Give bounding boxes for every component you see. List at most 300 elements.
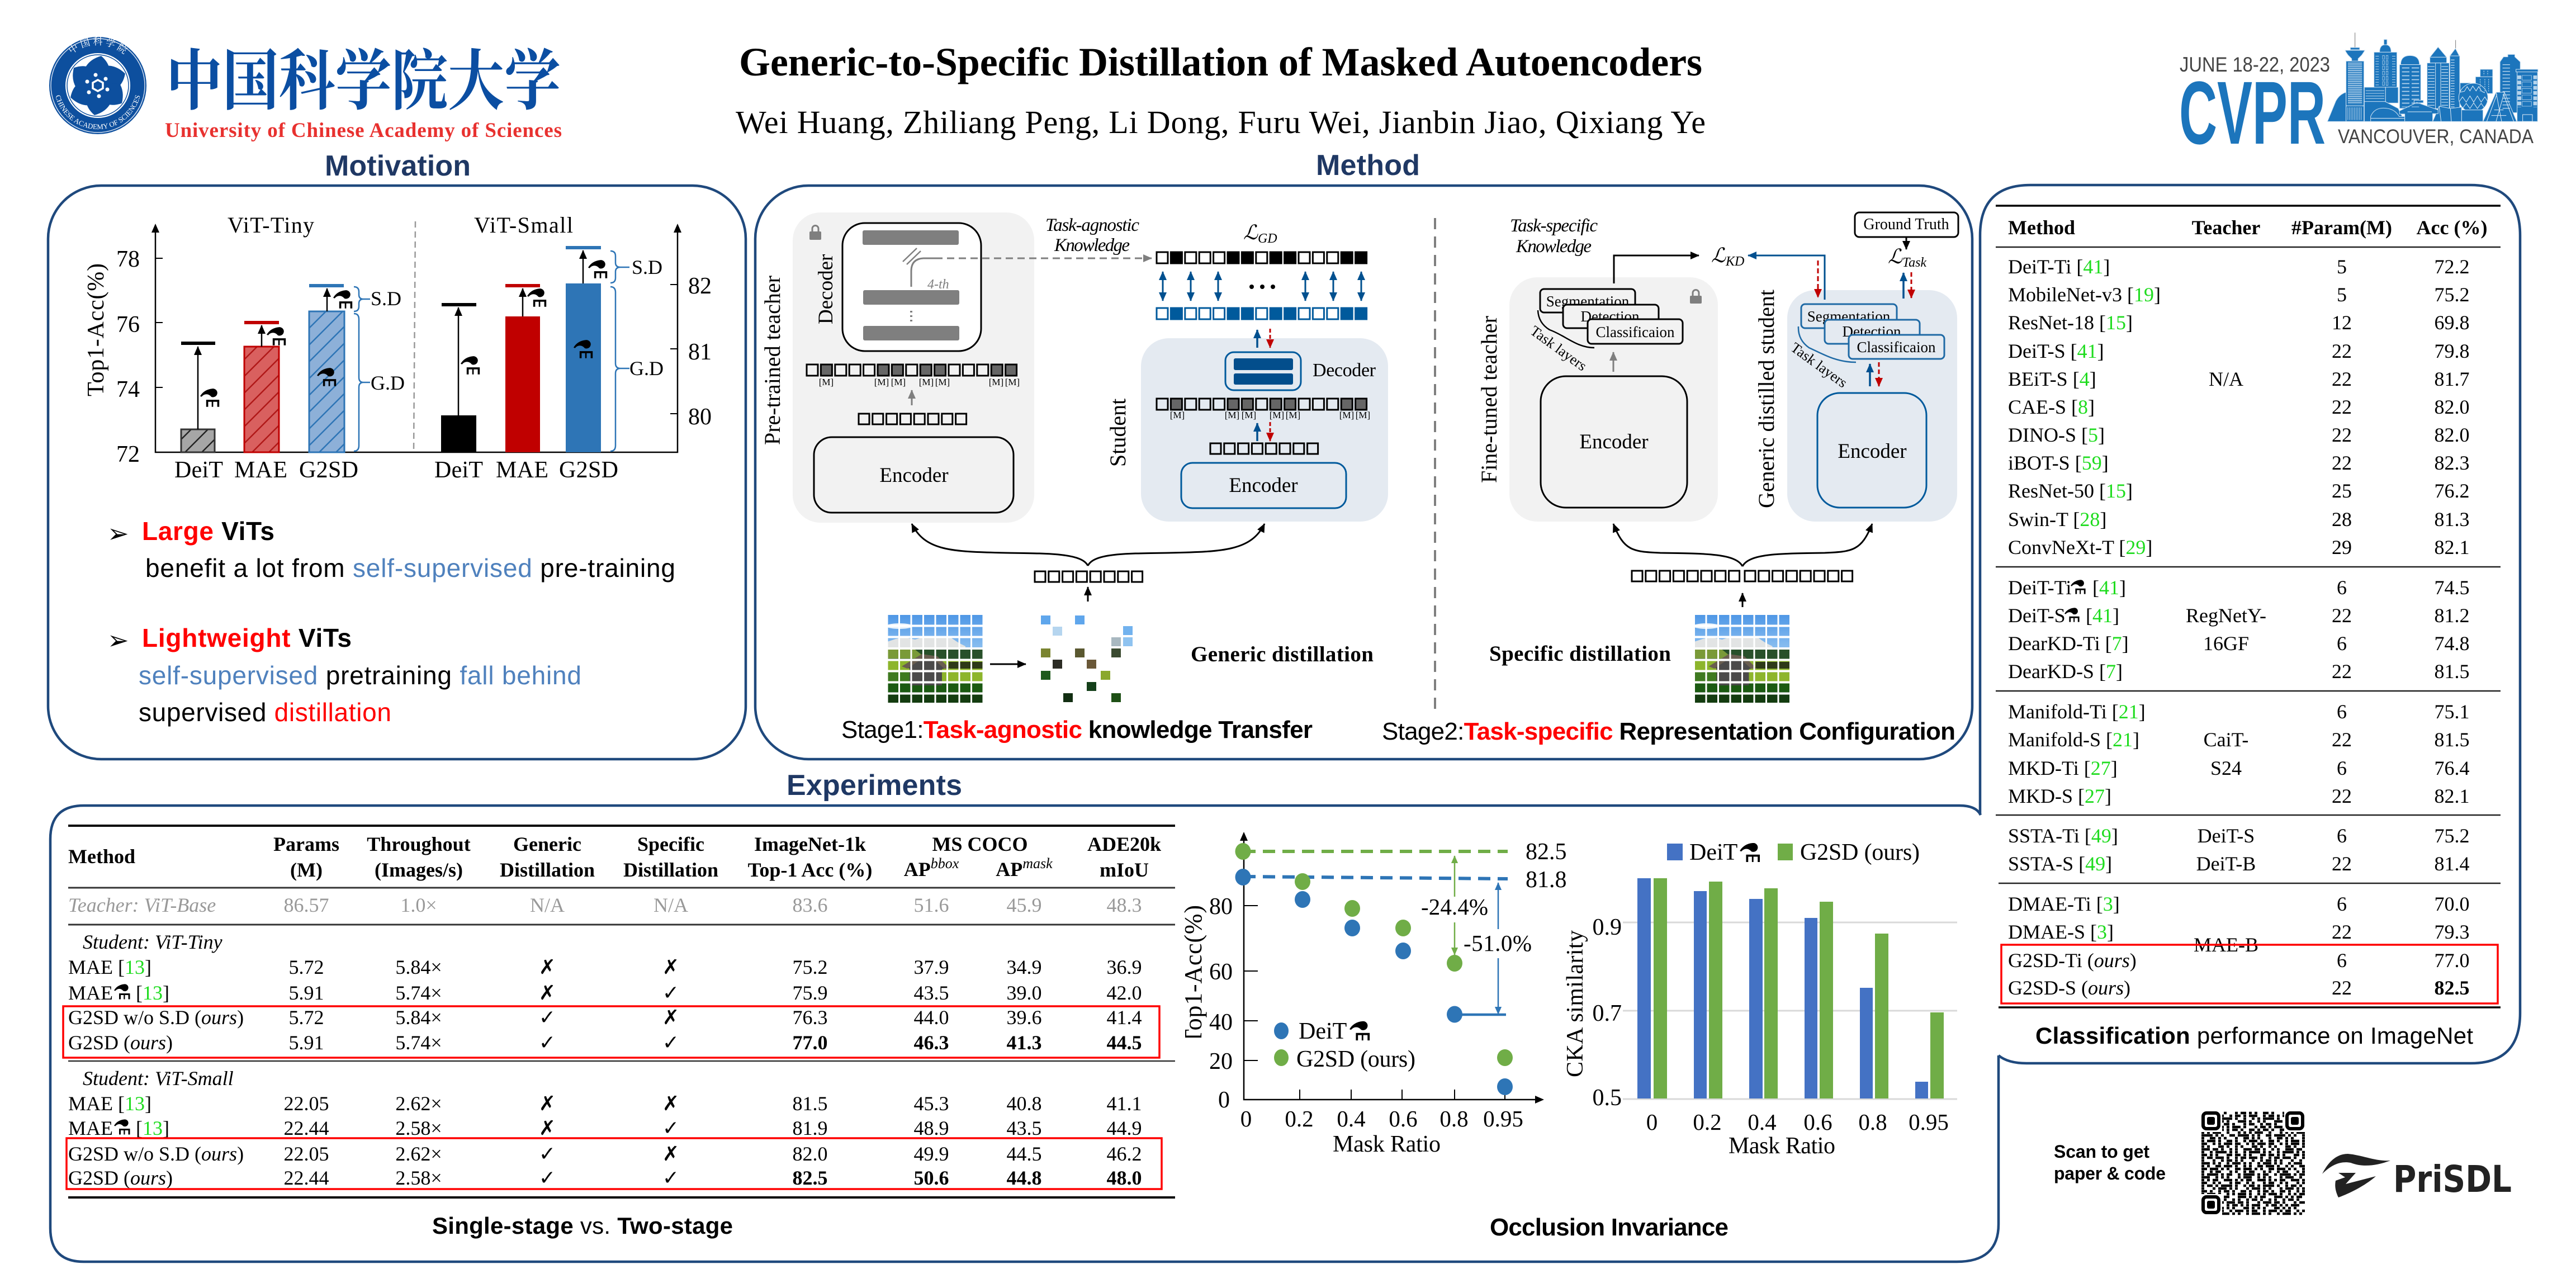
ground truth box: Ground Truth bbox=[1863, 216, 1949, 233]
accuracy column: 75.2 bbox=[2434, 825, 2470, 847]
group: student ViT-Tiny: 5.72 bbox=[288, 1006, 324, 1029]
group: student ViT-Small: 48.0 bbox=[1107, 1167, 1142, 1189]
image: patchified photo bbox=[886, 615, 983, 703]
table header bbox=[68, 833, 1161, 881]
loss: task: ℒ bbox=[1888, 245, 1902, 268]
group: student ViT-Small: 40.8 bbox=[1006, 1092, 1042, 1115]
tokens and student: Decoder bbox=[1313, 360, 1376, 381]
group: student ViT-Small: 44.8 bbox=[1006, 1167, 1042, 1189]
method column: MobileNet-v3 [19] bbox=[2008, 283, 2161, 306]
bullet: Large ViTs: ➢ bbox=[107, 519, 129, 548]
group: student ViT-Small: ✗ bbox=[539, 1092, 556, 1115]
group: student ViT-Small: ✗ bbox=[662, 1092, 679, 1115]
table header: #Param(M) bbox=[2291, 216, 2392, 239]
group: student ViT-Tiny: 39.0 bbox=[1006, 982, 1042, 1004]
authors: Wei Huang, Zhiliang Peng, Li Dong, Furu Wei, Jianbin Jiao, Qixiang Ye bbox=[736, 104, 1706, 140]
fine-tuned teacher bbox=[1476, 277, 1718, 522]
param column: 6 bbox=[2337, 825, 2347, 847]
group: student ViT-Tiny: 5.74× bbox=[395, 982, 442, 1004]
bar chart: ViT-Tiny and ViT-Small accuracy: S.D bbox=[371, 287, 401, 310]
group: student ViT-Small: ✓ bbox=[662, 1117, 679, 1140]
arrow: patches to both encoders bbox=[1613, 524, 1872, 566]
caption: occlusion invariance: Occlusion Invariance bbox=[1490, 1214, 1729, 1241]
panel: Method bbox=[755, 186, 1972, 759]
task-agnostic knowledge label: Task-agnostic bbox=[1045, 215, 1139, 235]
fine-tuned teacher: Task layers bbox=[1527, 323, 1590, 374]
scatter chart: accuracy vs mask ratio: 81.8 bbox=[1526, 867, 1566, 893]
param column: 25 bbox=[2332, 480, 2352, 502]
label: generic distillation: Generic distillation bbox=[1191, 642, 1374, 666]
accuracy column: 75.2 bbox=[2434, 283, 2470, 306]
accuracy column: 79.8 bbox=[2434, 340, 2470, 362]
method column: [41] bbox=[2092, 576, 2126, 599]
bullet: Lightweight ViTs: Lightweight ViTs bbox=[142, 623, 352, 652]
group: student ViT-Tiny: 44.0 bbox=[913, 1006, 949, 1029]
method column: DearKD-S [7] bbox=[2008, 660, 2123, 683]
accuracy column: 79.3 bbox=[2434, 921, 2470, 943]
accuracy column: 77.0 bbox=[2434, 949, 2470, 972]
bar chart: ViT-Tiny and ViT-Small accuracy: DeiT bbox=[174, 457, 223, 483]
generic distilled student: Detection bbox=[1843, 323, 1901, 340]
table header: mask bbox=[1022, 855, 1053, 872]
teacher column: DeiT-S bbox=[2198, 825, 2255, 847]
row: teacher: 1.0× bbox=[400, 894, 437, 916]
param column: 28 bbox=[2332, 508, 2352, 531]
table header: AP bbox=[996, 858, 1022, 880]
bar chart: ViT-Tiny and ViT-Small accuracy: ViT-Tiny bbox=[228, 212, 314, 238]
bar chart: CKA similarity vs mask ratio: DeiT bbox=[1689, 840, 1737, 865]
image: patchified photo bbox=[1693, 615, 1790, 703]
tokens and student: Student bbox=[1105, 399, 1130, 467]
bar chart: ViT-Tiny and ViT-Small accuracy: S.D bbox=[632, 256, 662, 278]
logo: CVPR 2023: VANCOUVER, CANADA bbox=[2338, 126, 2534, 148]
group: student ViT-Tiny: ✗ bbox=[539, 956, 556, 979]
fine-tuned teacher: Detection bbox=[1581, 308, 1640, 325]
caption: single-stage vs two-stage: Single-stage vs. Two-stage bbox=[432, 1213, 733, 1239]
group: student ViT-Small: 82.5 bbox=[793, 1167, 827, 1189]
fine-tuned teacher: Segmentation bbox=[1546, 293, 1630, 310]
pre-trained teacher: [M] bbox=[1005, 377, 1020, 387]
input tokens bbox=[1035, 571, 1143, 582]
scatter chart: accuracy vs mask ratio: 82.5 bbox=[1526, 839, 1566, 865]
task-specific knowledge label bbox=[1510, 216, 1598, 257]
row: teacher: 83.6 bbox=[793, 894, 827, 916]
table header: Teacher bbox=[2192, 216, 2260, 239]
accuracy column: 82.3 bbox=[2434, 452, 2470, 474]
bar chart: CKA similarity vs mask ratio: 0.95 bbox=[1909, 1109, 1949, 1135]
bar chart: ViT-Tiny and ViT-Small accuracy: 76 bbox=[116, 312, 140, 338]
arrow: task-agnostic knowledge transfer bbox=[935, 257, 1152, 259]
group: student ViT-Tiny: G2SD (ours) bbox=[68, 1031, 173, 1054]
group: student ViT-Small: 50.6 bbox=[913, 1167, 949, 1189]
group: student ViT-Tiny: 39.6 bbox=[1006, 1006, 1042, 1029]
task-specific knowledge label: Task-specific bbox=[1510, 216, 1598, 236]
heading: Experiments: Experiments bbox=[787, 769, 962, 802]
pre-trained teacher: [M] bbox=[874, 377, 889, 387]
tokens and student: [M] bbox=[1170, 410, 1185, 420]
bar chart: CKA similarity vs mask ratio: Mask Ratio bbox=[1729, 1133, 1835, 1159]
method column: G2SD-Ti (ours) bbox=[2008, 949, 2137, 972]
pre-trained teacher: [M] bbox=[819, 377, 834, 387]
scatter chart: accuracy vs mask ratio: Top1-Acc(%) bbox=[1180, 905, 1207, 1044]
table header: Distillation bbox=[623, 859, 718, 881]
accuracy column: 81.4 bbox=[2434, 853, 2470, 875]
logo: CVPR 2023 bbox=[2179, 32, 2538, 163]
group: student ViT-Small: ✗ bbox=[662, 1143, 679, 1166]
group: student ViT-Tiny bbox=[68, 931, 1142, 1054]
group: student ViT-Tiny: 41.4 bbox=[1107, 1006, 1142, 1029]
bar chart: CKA similarity vs mask ratio: G2SD (ours) bbox=[1800, 840, 1920, 865]
bullet: Large ViTs: benefit a lot from self-supervised pre-training bbox=[145, 553, 675, 583]
table header: MS COCO bbox=[932, 833, 1027, 855]
param column: 22 bbox=[2332, 396, 2352, 418]
group: student ViT-Small: 22.05 bbox=[284, 1092, 329, 1115]
QR code bbox=[2200, 1110, 2306, 1216]
image: masked patches bbox=[1041, 615, 1133, 702]
param column: 6 bbox=[2337, 949, 2347, 972]
bar chart: ViT-Tiny and ViT-Small accuracy: MAE bbox=[496, 457, 548, 483]
scatter chart: accuracy vs mask ratio: 60 bbox=[1209, 959, 1233, 985]
scatter chart: accuracy vs mask ratio: DeiT bbox=[1299, 1019, 1347, 1044]
bar chart: ViT-Tiny and ViT-Small accuracy: 80 bbox=[688, 404, 712, 430]
method column: [41] bbox=[2086, 604, 2119, 627]
group: student ViT-Small: 82.0 bbox=[793, 1143, 827, 1165]
logo: university name: 中国科学院大学 bbox=[166, 28, 561, 123]
heading: Motivation: Motivation bbox=[325, 150, 471, 182]
accuracy column: 82.1 bbox=[2434, 785, 2470, 807]
teacher column: MAE-B bbox=[2194, 934, 2258, 956]
param column: 6 bbox=[2337, 893, 2347, 915]
param column: 5 bbox=[2337, 255, 2347, 278]
stage 2 diagram: specific distillation bbox=[1476, 212, 1958, 703]
bar chart: ViT-Tiny and ViT-Small accuracy: G2SD bbox=[299, 457, 358, 483]
generic distilled student: Classificaion bbox=[1857, 339, 1936, 356]
table header: Distillation bbox=[500, 859, 595, 881]
scatter chart: accuracy vs mask ratio: -24.4% bbox=[1421, 894, 1488, 920]
param column: 22 bbox=[2332, 452, 2352, 474]
bar chart: CKA similarity vs mask ratio: 0 bbox=[1646, 1109, 1658, 1135]
scan note: paper & code bbox=[2054, 1163, 2166, 1183]
param column: 22 bbox=[2332, 728, 2352, 751]
group: student ViT-Small: G2SD w/o S.D (ours) bbox=[68, 1143, 244, 1165]
table header: AP bbox=[904, 858, 931, 880]
row: teacher: 48.3 bbox=[1107, 894, 1142, 916]
tokens and student: [M] bbox=[1286, 410, 1300, 420]
group: student ViT-Small: ✗ bbox=[539, 1117, 556, 1140]
param column: 6 bbox=[2337, 700, 2347, 723]
accuracy column: 74.8 bbox=[2434, 632, 2470, 655]
loss: knowledge distillation: KD bbox=[1725, 254, 1744, 269]
heading: Method: Method bbox=[1316, 149, 1420, 182]
group: student ViT-Tiny: 5.91 bbox=[288, 982, 324, 1004]
table header: Acc (%) bbox=[2417, 216, 2487, 239]
group: student ViT-Tiny: 75.2 bbox=[793, 956, 827, 978]
group: student ViT-Tiny: ✗ bbox=[662, 1006, 679, 1029]
bar chart: CKA similarity vs mask ratio: 0.5 bbox=[1592, 1085, 1622, 1111]
highlight: ViT-Small G2SD rows bbox=[67, 1138, 1162, 1189]
accuracy column: 81.5 bbox=[2434, 728, 2470, 751]
teacher column: N/A bbox=[2209, 368, 2243, 390]
table header: bbox bbox=[931, 855, 959, 872]
tokens and student: [M] bbox=[1225, 410, 1239, 420]
bar chart: ViT-Tiny and ViT-Small accuracy: MAE bbox=[234, 457, 287, 483]
table header: Generic bbox=[513, 833, 581, 855]
param column: 29 bbox=[2332, 536, 2352, 558]
stage 1 diagram: generic distillation bbox=[760, 212, 1388, 703]
group: student ViT-Tiny: 36.9 bbox=[1107, 956, 1142, 978]
scatter chart: accuracy vs mask ratio: 0 bbox=[1218, 1087, 1230, 1113]
param column: 22 bbox=[2332, 604, 2352, 627]
fine-tuned teacher: Fine-tuned teacher bbox=[1476, 316, 1502, 483]
table header: ADE20k bbox=[1087, 833, 1161, 855]
accuracy column: 82.1 bbox=[2434, 536, 2470, 558]
group: student ViT-Small: 2.58× bbox=[395, 1117, 442, 1139]
scatter chart: accuracy vs mask ratio: 0.95 bbox=[1483, 1106, 1523, 1131]
group: student ViT-Small: 81.9 bbox=[793, 1117, 827, 1139]
method column: CAE-S [8] bbox=[2008, 396, 2095, 418]
group: student ViT-Tiny: ✓ bbox=[662, 982, 679, 1005]
param column: 12 bbox=[2332, 311, 2352, 334]
caption: classification performance: Classification performance on ImageNet bbox=[2035, 1022, 2473, 1049]
arrow: masked patches to tokens bbox=[1087, 587, 1089, 602]
tokens and student: Encoder bbox=[1229, 474, 1298, 497]
row: teacher bbox=[68, 894, 1142, 916]
method column: DMAE-S [3] bbox=[2008, 921, 2114, 943]
group: student ViT-Small: 22.05 bbox=[284, 1143, 329, 1165]
table header: mIoU bbox=[1100, 859, 1149, 881]
group: student ViT-Small: 49.9 bbox=[913, 1143, 949, 1165]
teacher column: RegNetY- bbox=[2186, 604, 2266, 627]
pre-trained teacher: [M] bbox=[919, 377, 934, 387]
group: student ViT-Tiny: ✗ bbox=[539, 982, 556, 1005]
accuracy column: 81.3 bbox=[2434, 508, 2470, 531]
scatter chart: accuracy vs mask ratio: G2SD (ours) bbox=[1296, 1046, 1415, 1072]
param column: 6 bbox=[2337, 576, 2347, 599]
row: teacher: 45.9 bbox=[1006, 894, 1042, 916]
generic distilled student: Generic distilled student bbox=[1754, 290, 1779, 508]
divider between stages bbox=[1434, 218, 1436, 709]
panel: Experiments frame bbox=[50, 806, 1999, 1262]
table: single-stage vs two-stage bbox=[63, 826, 1175, 1197]
group: student ViT-Small: G2SD (ours) bbox=[68, 1167, 173, 1189]
logo: CVPR 2023: CVPR bbox=[2179, 63, 2326, 163]
bar chart: CKA similarity vs mask ratio: 0.7 bbox=[1592, 1001, 1622, 1026]
group: student ViT-Tiny: 42.0 bbox=[1107, 982, 1142, 1004]
group: student ViT-Tiny: ✓ bbox=[539, 1006, 556, 1029]
group: student ViT-Small: ✓ bbox=[539, 1143, 556, 1166]
group: student ViT-Tiny: ✗ bbox=[662, 956, 679, 979]
group: student ViT-Tiny: 75.9 bbox=[793, 982, 827, 1004]
group: student ViT-Small: 22.44 bbox=[284, 1167, 329, 1189]
group: student ViT-Tiny: [13] bbox=[136, 982, 169, 1004]
loss: generic distillation: ℒ bbox=[1243, 221, 1258, 244]
pre-trained teacher: Encoder bbox=[879, 464, 949, 487]
method column: DeiT-Ti [41] bbox=[2008, 255, 2110, 278]
bar chart: ViT-Tiny and ViT-Small accuracy: G.D bbox=[629, 357, 664, 380]
arrow: patches to both encoders bbox=[912, 524, 1265, 566]
group: student ViT-Tiny: 77.0 bbox=[793, 1031, 827, 1054]
accuracy column: 81.5 bbox=[2434, 660, 2470, 683]
row: teacher: 51.6 bbox=[913, 894, 949, 916]
group: student ViT-Small: 41.1 bbox=[1107, 1092, 1142, 1115]
generic distilled student: Task layers bbox=[1788, 339, 1850, 391]
bar chart: ViT-Tiny and ViT-Small accuracy: 74 bbox=[116, 377, 140, 402]
panel: Classification frame bbox=[1980, 185, 2520, 1063]
pre-trained teacher: Pre-trained teacher bbox=[760, 276, 785, 445]
table header bbox=[2008, 216, 2487, 239]
highlight: ViT-Tiny G2SD rows bbox=[63, 1006, 1159, 1058]
title: Generic-to-Specific Distillation of Masked Autoencoders bbox=[739, 40, 1702, 84]
table header: Method bbox=[68, 845, 135, 868]
teacher column: S24 bbox=[2210, 757, 2242, 779]
accuracy column: 74.5 bbox=[2434, 576, 2470, 599]
method column: iBOT-S [59] bbox=[2008, 452, 2109, 474]
bar chart: ViT-Tiny and ViT-Small accuracy: Top1-Acc(%) bbox=[83, 263, 109, 396]
group: student ViT-Tiny: 44.5 bbox=[1107, 1031, 1142, 1054]
scatter chart: accuracy vs mask ratio: 0.8 bbox=[1439, 1106, 1469, 1131]
bar chart: ViT-Tiny and ViT-Small accuracy: 72 bbox=[116, 442, 140, 467]
ground truth box bbox=[1855, 212, 1958, 237]
group: student ViT-Tiny: 37.9 bbox=[913, 956, 949, 978]
method column: DINO-S [5] bbox=[2008, 424, 2105, 446]
logo: university name: University of Chinese Academy of Sciences bbox=[165, 119, 562, 142]
group: student ViT-Tiny: MAE [13] bbox=[68, 956, 151, 978]
row: teacher: N/A bbox=[654, 894, 688, 916]
scatter chart: accuracy vs mask ratio: 40 bbox=[1209, 1010, 1233, 1035]
row: teacher: Teacher: ViT-Base bbox=[68, 894, 216, 916]
method column: Swin-T [28] bbox=[2008, 508, 2106, 531]
group: student ViT-Tiny: 41.3 bbox=[1006, 1031, 1042, 1054]
logo: PriSDL: PriSDL bbox=[2393, 1158, 2512, 1201]
method column: Manifold-S [21] bbox=[2008, 728, 2139, 751]
group: student ViT-Tiny: Student: ViT-Tiny bbox=[83, 931, 222, 953]
method column: BEiT-S [4] bbox=[2008, 368, 2096, 390]
accuracy column: 69.8 bbox=[2434, 311, 2470, 334]
pre-trained teacher bbox=[760, 212, 1034, 523]
caption: stage 1: Stage1:Task-agnostic knowledge Transfer bbox=[841, 716, 1313, 744]
scatter chart: accuracy vs mask ratio: -51.0% bbox=[1464, 930, 1532, 956]
group: student ViT-Tiny: 5.72 bbox=[288, 956, 324, 978]
bar chart: ViT-Tiny and ViT-Small accuracy: G.D bbox=[371, 372, 405, 394]
group: student ViT-Small bbox=[68, 1067, 1142, 1190]
arrow: image to tokens bbox=[1742, 593, 1743, 607]
param column: 6 bbox=[2337, 757, 2347, 779]
bar chart: CKA similarity vs mask ratio: 0.9 bbox=[1592, 915, 1622, 940]
group: student ViT-Small: 22.44 bbox=[284, 1117, 329, 1139]
group: student ViT-Small: Student: ViT-Small bbox=[83, 1067, 234, 1090]
bar chart: CKA similarity vs mask ratio: 0.8 bbox=[1858, 1109, 1887, 1135]
bullet: Large ViTs bbox=[107, 517, 675, 583]
param column: 22 bbox=[2332, 340, 2352, 362]
arrow: ground truth to task loss bbox=[1905, 238, 1907, 249]
method column: ResNet-50 [15] bbox=[2008, 480, 2133, 502]
fine-tuned teacher: Classificaion bbox=[1596, 324, 1675, 340]
teacher column: DeiT-B bbox=[2196, 853, 2256, 875]
group: student ViT-Small: MAE bbox=[68, 1117, 113, 1139]
group: student ViT-Tiny: ✓ bbox=[662, 1031, 679, 1054]
fine-tuned teacher: Encoder bbox=[1579, 430, 1649, 453]
group: student ViT-Tiny: 76.3 bbox=[793, 1006, 827, 1029]
bar chart: CKA similarity vs mask ratio: 0.2 bbox=[1693, 1109, 1722, 1135]
bar chart: ViT-Tiny and ViT-Small accuracy: 81 bbox=[688, 339, 712, 365]
bar chart: ViT-Tiny and ViT-Small accuracy: ViT-Small bbox=[474, 212, 573, 238]
accuracy column: 75.1 bbox=[2434, 700, 2470, 723]
table header: (Images/s) bbox=[375, 859, 463, 881]
accuracy column: 82.5 bbox=[2434, 977, 2470, 999]
method column: DearKD-Ti [7] bbox=[2008, 632, 2129, 655]
label: specific distillation: Specific distillation bbox=[1489, 642, 1671, 666]
method column: SSTA-Ti [49] bbox=[2008, 825, 2118, 847]
param column: 22 bbox=[2332, 660, 2352, 683]
method column: SSTA-S [49] bbox=[2008, 853, 2112, 875]
group: student ViT-Tiny: 46.3 bbox=[913, 1031, 949, 1054]
group: student ViT-Small: 45.3 bbox=[913, 1092, 949, 1115]
param column: 5 bbox=[2337, 283, 2347, 306]
scan note: Scan to get bbox=[2054, 1142, 2149, 1162]
bar chart: ViT-Tiny and ViT-Small accuracy bbox=[83, 212, 712, 483]
accuracy column: 76.4 bbox=[2434, 757, 2470, 779]
group: student ViT-Tiny: 5.84× bbox=[395, 956, 442, 978]
bar chart: ViT-Tiny and ViT-Small accuracy: G2SD bbox=[559, 457, 618, 483]
param column: 6 bbox=[2337, 632, 2347, 655]
scan note bbox=[2054, 1142, 2166, 1183]
method column: DeiT-S bbox=[2008, 604, 2066, 627]
table header: Throughout bbox=[367, 833, 471, 855]
pre-trained teacher: 4-th bbox=[927, 277, 949, 292]
pre-trained teacher: [M] bbox=[935, 377, 950, 387]
input tokens bbox=[1632, 571, 1853, 581]
bullet: Lightweight ViTs: supervised distillation bbox=[139, 698, 391, 727]
bar chart: CKA similarity vs mask ratio: 0.6 bbox=[1803, 1109, 1832, 1135]
tokens and student bbox=[1105, 252, 1388, 522]
bullet: Large ViTs: Large ViTs bbox=[142, 517, 274, 546]
table header: Specific bbox=[637, 833, 704, 855]
group: student ViT-Small: 46.2 bbox=[1107, 1143, 1142, 1165]
scatter chart: accuracy vs mask ratio: 80 bbox=[1209, 894, 1233, 920]
task-agnostic knowledge label bbox=[1045, 215, 1139, 255]
table: classification performance on ImageNet bbox=[1996, 206, 2501, 1007]
pre-trained teacher: [M] bbox=[891, 377, 906, 387]
param column: 22 bbox=[2332, 368, 2352, 390]
arrow: masking bbox=[990, 663, 1026, 665]
group: student ViT-Tiny: 5.91 bbox=[288, 1031, 324, 1054]
scatter chart: accuracy vs mask ratio bbox=[1177, 832, 1566, 1157]
param column: 22 bbox=[2332, 424, 2352, 446]
scatter chart: accuracy vs mask ratio: 0.4 bbox=[1337, 1106, 1366, 1131]
highlight: G2SD rows bbox=[2001, 945, 2498, 1003]
group: student ViT-Small: 43.5 bbox=[1006, 1117, 1042, 1139]
group: student ViT-Small: 2.62× bbox=[395, 1092, 442, 1115]
logo: university seal bbox=[49, 37, 146, 134]
loss: knowledge distillation: ℒ bbox=[1711, 244, 1726, 267]
skyline bbox=[2327, 32, 2538, 121]
param column: 22 bbox=[2332, 921, 2352, 943]
method column: ConvNeXt-T [29] bbox=[2008, 536, 2152, 558]
tokens and student: [M] bbox=[1242, 410, 1256, 420]
table header: Top-1 Acc (%) bbox=[748, 859, 872, 881]
pre-trained teacher: [M] bbox=[989, 377, 1003, 387]
accuracy column: 70.0 bbox=[2434, 893, 2470, 915]
teacher column: CaiT- bbox=[2204, 728, 2248, 751]
scatter chart: accuracy vs mask ratio: Mask Ratio bbox=[1333, 1131, 1441, 1157]
bar chart: CKA similarity vs mask ratio: CKA similarity bbox=[1562, 930, 1588, 1077]
teacher column: 16GF bbox=[2203, 632, 2249, 655]
param column: 22 bbox=[2332, 785, 2352, 807]
accuracy column: 76.2 bbox=[2434, 480, 2470, 502]
group: student ViT-Small: 48.9 bbox=[913, 1117, 949, 1139]
group: student ViT-Small: 44.5 bbox=[1006, 1143, 1042, 1165]
accuracy column: 72.2 bbox=[2434, 255, 2470, 278]
